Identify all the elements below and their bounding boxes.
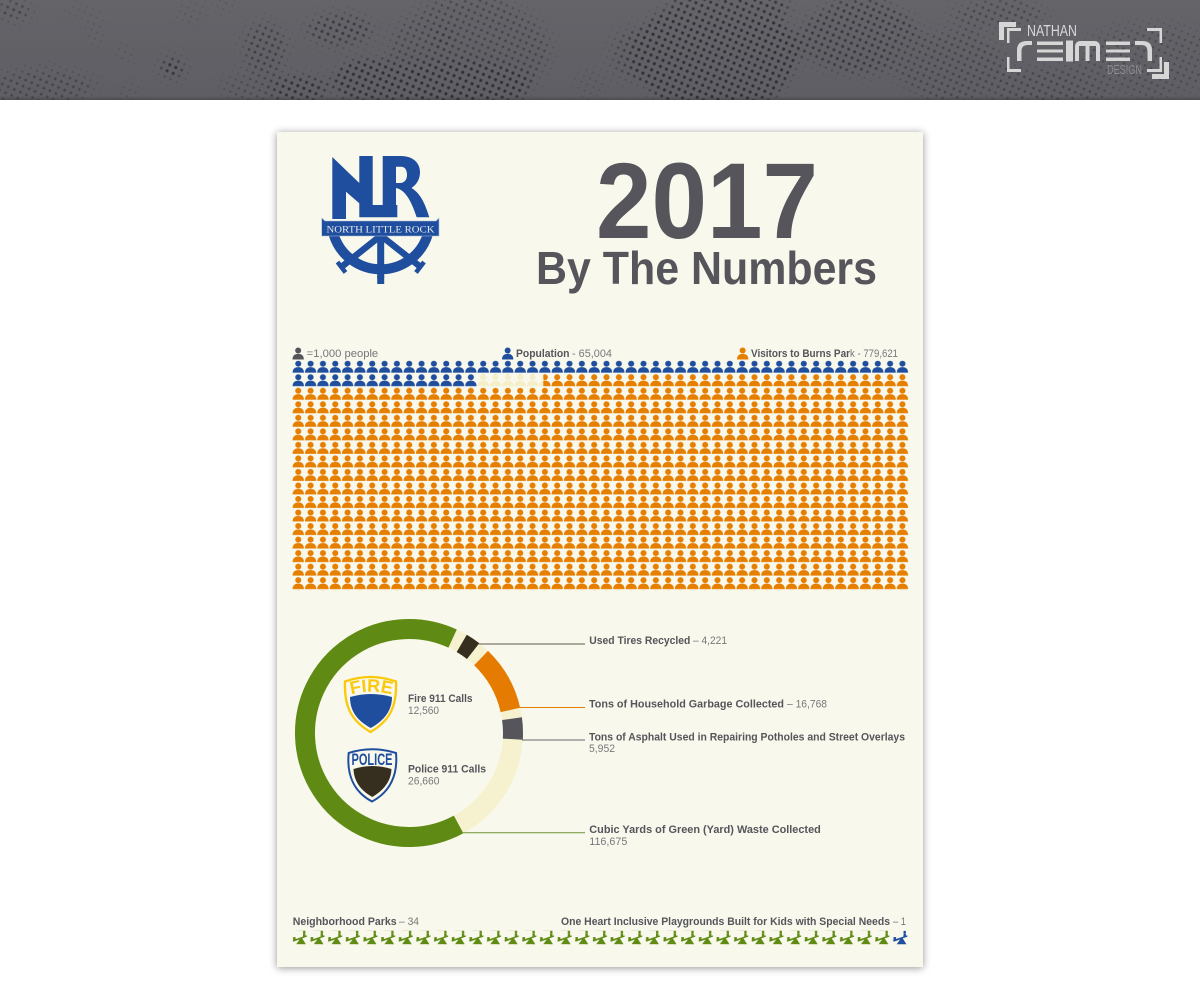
legend: population [502,348,612,360]
icon: Nathan Reimer Design logo: DESIGN [1107,63,1142,77]
wheel rim and spokes [334,232,428,284]
text: fire calls [408,693,472,717]
icon: police badge: POLICE [352,751,392,769]
label: asphalt: 5,952 [589,743,615,755]
icon: Nathan Reimer Design logo: NATHAN [1027,23,1077,40]
label: green waste [589,824,821,848]
label: household garbage: – 16,768 [787,699,827,711]
legend: visitors [737,348,898,360]
text: police calls: 26,660 [408,776,440,788]
header banner [0,0,1200,100]
label: inclusive playgrounds: One Heart Inclusive Playgrounds Built for Kids with Special Needs [561,916,890,928]
icon: fire badge: FIRE [350,679,393,694]
title: By The Numbers: By The Numbers [536,242,877,294]
label: asphalt: Tons of Asphalt Used in Repairing Potholes and Street Overlays [589,731,905,743]
icon: police badge [348,749,396,802]
label: green waste: 116,675 [589,836,627,848]
legend: visitors: k - 779,621 [850,348,898,360]
leader lines [462,644,585,833]
legend: 1,000 people: =1,000 people [307,348,378,360]
text: police calls: Police 911 Calls [408,764,486,776]
legend: population: Population [516,348,570,360]
legend: population: - 65,004 [572,348,612,360]
text: fire calls: 12,560 [408,705,439,717]
panel: poster card [277,132,923,967]
label: green waste: Cubic Yards of Green (Yard) Waste Collected [589,824,821,836]
icon: Nathan Reimer Design logo [999,22,1169,79]
pictogram: seesaw row [293,931,908,944]
icon: fire badge [344,676,398,734]
icon: North Little Rock logo [322,156,439,284]
label: inclusive playgrounds: – 1 [893,916,906,928]
label: used tires: Used Tires Recycled [589,635,690,647]
label: used tires: – 4,221 [693,635,727,647]
title: 2017: 2017 [596,140,818,261]
banner: NORTH LITTLE ROCK [326,226,435,236]
label: household garbage: Tons of Household Garbage Collected [589,699,784,711]
text: police calls [408,764,486,788]
legend: visitors: Visitors to Burns Par [751,348,851,360]
text: fire calls: Fire 911 Calls [408,693,472,705]
label: neighborhood parks: – 34 [399,916,419,928]
donut chart [305,629,513,837]
pictogram chart: people grid [292,361,909,591]
label: neighborhood parks: Neighborhood Parks [293,916,397,928]
label: asphalt [589,731,905,755]
